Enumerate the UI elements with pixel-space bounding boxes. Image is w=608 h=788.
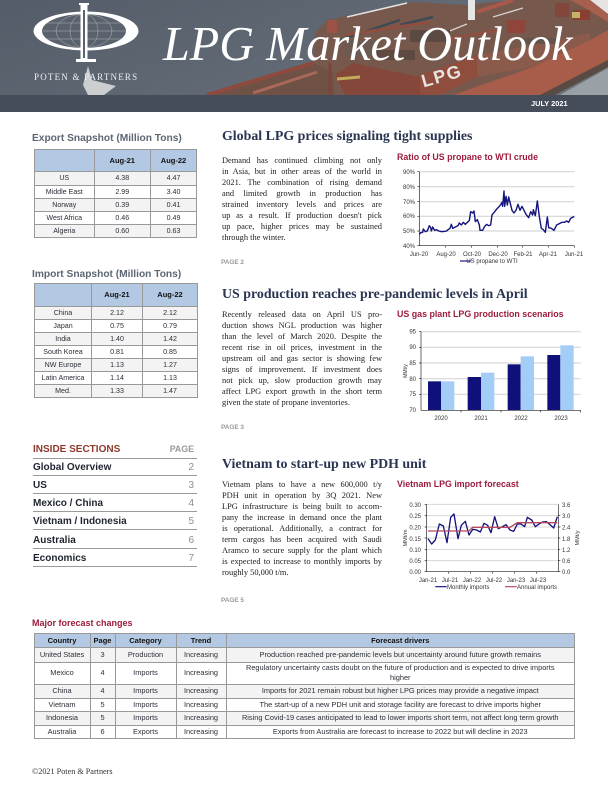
page reference: PAGE 5 bbox=[221, 597, 244, 604]
section row bbox=[33, 531, 197, 549]
line chart: propane to WTI ratio: Jun-20 bbox=[410, 252, 429, 258]
text: US production: given the state of propane inventories. bbox=[222, 398, 350, 407]
line chart: Vietnam import forecast: 1.8 bbox=[562, 537, 571, 543]
table: major forecast changes: higher bbox=[390, 673, 411, 682]
logo wordmark: POTEN & PARTNERS bbox=[34, 72, 138, 82]
text: global prices: Demand has continued climbing not only bbox=[222, 156, 382, 165]
table: import snapshot: 0.81 bbox=[110, 348, 124, 356]
table: major forecast changes: Imports bbox=[133, 713, 158, 722]
text: Vietnam: is operational. Additionally, a contract for bbox=[222, 524, 382, 533]
section row bbox=[33, 458, 197, 476]
bar chart: production scenarios: 70 bbox=[409, 408, 417, 414]
date band bbox=[0, 95, 608, 112]
table: major forecast changes: Australia bbox=[48, 727, 76, 736]
bar chart: production scenarios: 80 bbox=[409, 377, 417, 383]
text: Vietnam: PDH unit in operation by 3Q 2021. New bbox=[222, 491, 382, 500]
line chart: Vietnam import forecast: 0.20 bbox=[409, 526, 422, 532]
text: global prices: in Asia, but in other areas of the world in bbox=[222, 167, 382, 176]
heading: major forecast changes: Major forecast changes bbox=[32, 618, 133, 628]
line chart: propane to WTI ratio: US propane to WTI bbox=[466, 259, 518, 265]
text: US production: duction shows NGL production was higher bbox=[222, 321, 382, 330]
line chart: Vietnam import forecast: 0.15 bbox=[409, 537, 422, 543]
line chart: Vietnam import forecast: 3.0 bbox=[562, 514, 571, 520]
table: import snapshot: 1.13 bbox=[163, 374, 177, 382]
line chart: propane to WTI ratio: Jun-21 bbox=[565, 252, 584, 258]
page reference: PAGE 2 bbox=[221, 259, 244, 266]
line chart: propane to WTI ratio: 40% bbox=[403, 244, 416, 250]
table: export snapshot: 4.47 bbox=[167, 174, 180, 182]
table: import snapshot: 1.40 bbox=[110, 334, 124, 342]
line chart: Vietnam import forecast: Jan-21 bbox=[419, 578, 438, 584]
table: import snapshot: Med. bbox=[55, 386, 71, 394]
section row: Vietnam / Indonesia bbox=[33, 516, 127, 527]
line chart: propane to WTI ratio: 50% bbox=[403, 229, 416, 235]
section row: US bbox=[33, 480, 47, 491]
table: import snapshot: China bbox=[54, 308, 72, 316]
table: major forecast changes: Rising Covid-19 cases anticipated to lead to lower imports short term, not affect long term growth bbox=[242, 713, 559, 722]
inside sections heading bbox=[33, 442, 197, 459]
line chart: propane to WTI ratio: 80% bbox=[403, 185, 416, 191]
table: export snapshot: 0.39 bbox=[115, 201, 129, 209]
text: US production: than the level of March 2020. Despite the bbox=[222, 332, 382, 341]
table: export snapshot: 0.49 bbox=[167, 214, 180, 222]
section row: 5 bbox=[188, 516, 194, 527]
table: major forecast changes: Exports from Australia are forecast to increase to 2022 but will decline in 2023 bbox=[273, 727, 528, 736]
line chart: Vietnam import forecast: 0.6 bbox=[562, 559, 571, 565]
table: export snapshot: 4.38 bbox=[115, 174, 129, 182]
bar chart: production scenarios: 85 bbox=[409, 361, 417, 367]
bar chart: production scenarios: 95 bbox=[409, 330, 417, 336]
line chart: Vietnam import forecast: Annual imports bbox=[517, 585, 557, 591]
table: export snapshot: Algeria bbox=[53, 227, 75, 235]
table: import snapshot: 1.27 bbox=[163, 360, 177, 368]
chart title: Vietnam imports: Vietnam LPG import forecast bbox=[397, 479, 519, 489]
table: import snapshot: Aug-21 bbox=[104, 290, 130, 299]
bar chart: production scenarios: 2022 bbox=[514, 416, 528, 422]
line chart: Vietnam import forecast: Jul-23 bbox=[530, 578, 547, 584]
bar chart: production scenarios: 2020 bbox=[434, 416, 448, 422]
section row bbox=[33, 549, 197, 567]
table: import snapshot: 0.79 bbox=[163, 322, 177, 330]
ship hull lettering: LPG bbox=[419, 61, 464, 91]
chart title: propane ratio: Ratio of US propane to WTI crude bbox=[397, 152, 538, 162]
section row: Australia bbox=[33, 535, 76, 546]
bar chart: production scenarios: 90 bbox=[409, 345, 417, 351]
line chart: Vietnam import forecast: Monthly imports bbox=[447, 585, 489, 591]
text: US production: signs of improvement. If investment does bbox=[222, 365, 382, 374]
table: major forecast changes bbox=[34, 633, 575, 739]
line chart: Vietnam import forecast: 0.25 bbox=[409, 514, 422, 520]
text: Vietnam bbox=[222, 480, 382, 577]
line chart: Vietnam import forecast: MMt/m bbox=[403, 529, 409, 546]
table: major forecast changes: Indonesia bbox=[46, 713, 78, 722]
section row bbox=[33, 476, 197, 494]
text: Vietnam: Vietnam plans to have a new 600,000 t/y bbox=[222, 480, 382, 489]
table: major forecast changes: Increasing bbox=[184, 700, 218, 709]
line chart: propane to WTI ratio: 90% bbox=[403, 170, 416, 176]
table: major forecast changes: Increasing bbox=[184, 686, 218, 695]
table: import snapshot: 1.13 bbox=[110, 360, 124, 368]
section row: 4 bbox=[188, 498, 194, 509]
text: US production: recent rise in oil prices, investment in the bbox=[222, 343, 382, 352]
panel: inside sections bbox=[33, 444, 197, 567]
table: major forecast changes: Production bbox=[128, 650, 163, 659]
bar chart: production scenarios: MMt/y bbox=[403, 364, 409, 378]
line chart: propane to WTI ratio: Dec-20 bbox=[488, 252, 508, 258]
text: US production: affect LPG export growth in the short term bbox=[222, 387, 382, 396]
table: major forecast changes: Forecast drivers bbox=[371, 636, 429, 644]
table: major forecast changes: 4 bbox=[100, 686, 105, 695]
line chart: Vietnam import forecast: 2.4 bbox=[562, 526, 571, 532]
line chart: propane to WTI ratio: Feb-21 bbox=[513, 252, 533, 258]
section row: Global Overview bbox=[33, 462, 111, 473]
table: major forecast changes: Category bbox=[129, 636, 162, 644]
table: import snapshot: India bbox=[55, 334, 71, 342]
line chart: Vietnam import forecast: MMt/y bbox=[575, 530, 581, 545]
bar chart: production scenarios: 2023 bbox=[554, 416, 568, 422]
table: export snapshot: Aug-22 bbox=[161, 156, 186, 164]
footer copyright: ©2021 Poten & Partners bbox=[32, 767, 113, 776]
text: Vietnam: Aramco to secure supply for the plant which bbox=[222, 546, 382, 555]
text: US production: upstream oil and gas sector is showing few bbox=[222, 354, 382, 363]
section row: 2 bbox=[188, 462, 194, 473]
text: Vietnam: term cargos has been acquired with Saudi bbox=[222, 535, 382, 544]
text: global prices: and limited growth in production has bbox=[222, 189, 382, 198]
table: import snapshot: 0.85 bbox=[163, 348, 177, 356]
text: global prices bbox=[222, 156, 382, 242]
logo emblem bbox=[34, 3, 138, 95]
table: export snapshot: 0.60 bbox=[115, 227, 129, 235]
text: Vietnam: roughly 50,000 t/m. bbox=[222, 568, 289, 577]
heading: import snapshot: Import Snapshot (Million Tons) bbox=[32, 269, 181, 280]
text: Vietnam: pany the increase in demand once the plant bbox=[222, 513, 382, 522]
section row bbox=[33, 494, 197, 512]
table: major forecast changes: Page bbox=[94, 636, 111, 644]
table: export snapshot: Aug-21 bbox=[110, 156, 135, 164]
line chart: Vietnam import forecast: 0.05 bbox=[409, 559, 422, 565]
section row: Mexico / China bbox=[33, 498, 103, 509]
section row bbox=[33, 512, 197, 530]
table: import snapshot: 1.14 bbox=[110, 374, 124, 382]
section row: 6 bbox=[188, 535, 194, 546]
bar chart: production scenarios: 75 bbox=[409, 392, 417, 398]
text: global prices: through the winter. bbox=[222, 233, 286, 242]
header banner with ship photo, logo and title bbox=[0, 0, 608, 112]
table: import snapshot: Latin America bbox=[42, 374, 84, 382]
table: major forecast changes: Imports bbox=[133, 686, 158, 695]
line chart: propane to WTI ratio: 70% bbox=[403, 200, 416, 206]
line chart: Vietnam import forecast: 0.0 bbox=[562, 570, 571, 576]
table: major forecast changes: Imports for 2021 remain robust but higher LPG prices may provide a negative impact bbox=[262, 686, 539, 695]
table: import snapshot: 2.12 bbox=[163, 308, 177, 316]
logo: Poten and Partners bbox=[34, 3, 138, 95]
section row: 3 bbox=[188, 480, 194, 491]
table: major forecast changes: The start-up of a new PDH unit and storage facility are forecast to drive imports higher bbox=[260, 700, 541, 709]
text: Vietnam: LPG infrastructure is being built to accom- bbox=[222, 502, 382, 511]
section row: Economics bbox=[33, 553, 86, 564]
section row: 7 bbox=[188, 553, 194, 564]
title: LPG Market Outlook bbox=[163, 18, 573, 71]
line chart: propane to WTI ratio: 60% bbox=[403, 214, 416, 220]
line chart: Vietnam import forecast: Jan-22 bbox=[463, 578, 482, 584]
table: major forecast changes: Imports bbox=[133, 668, 158, 677]
table: major forecast changes: Country bbox=[48, 636, 76, 644]
text: global prices: up as a result. If production doesn't pick bbox=[222, 211, 382, 220]
table: major forecast changes: Regulatory uncertainty casts doubt on the future of production and is expected to drive imports bbox=[246, 663, 555, 672]
table: major forecast changes: Increasing bbox=[184, 650, 218, 659]
table: major forecast changes: 5 bbox=[100, 700, 105, 709]
chart title: gas plant production: US gas plant LPG production scenarios bbox=[397, 309, 564, 319]
table: major forecast changes: Production reached pre-pandemic levels but uncertainty around future growth remains bbox=[260, 650, 541, 659]
text: Vietnam: is expected to increase to monthly imports by bbox=[222, 557, 382, 566]
page reference: PAGE 3 bbox=[221, 424, 244, 431]
table: export snapshot: 0.41 bbox=[167, 201, 180, 209]
table: export snapshot: West Africa bbox=[46, 214, 82, 222]
table: export snapshot bbox=[34, 149, 197, 238]
table: major forecast changes: 5 bbox=[100, 713, 105, 722]
table: import snapshot: 1.33 bbox=[110, 386, 124, 394]
line chart: Vietnam import forecast: 0.30 bbox=[409, 503, 422, 509]
inside sections heading: INSIDE SECTIONS bbox=[33, 444, 120, 455]
table: export snapshot: 3.40 bbox=[167, 188, 180, 196]
table: export snapshot: 0.63 bbox=[167, 227, 180, 235]
table: export snapshot: US bbox=[59, 174, 69, 182]
text: global prices: strained inventory levels and prices are bbox=[222, 200, 382, 209]
heading: export snapshot: Export Snapshot (Million Tons) bbox=[32, 133, 182, 144]
line chart: Vietnam import forecast: Jul-21 bbox=[442, 578, 459, 584]
line chart: Vietnam import forecast: 1.2 bbox=[562, 548, 571, 554]
bar chart: production scenarios: 2021 bbox=[474, 416, 488, 422]
table: export snapshot: Norway bbox=[52, 201, 76, 209]
table: major forecast changes: United States bbox=[40, 650, 84, 659]
date: JULY 2021 bbox=[531, 99, 568, 108]
line chart: propane to WTI ratio: Aug-20 bbox=[436, 252, 456, 258]
table: import snapshot: Japan bbox=[53, 322, 73, 330]
table: import snapshot: 1.47 bbox=[163, 386, 177, 394]
table: import snapshot bbox=[34, 283, 198, 398]
table: major forecast changes: Increasing bbox=[184, 727, 218, 736]
table: import snapshot: South Korea bbox=[43, 348, 83, 356]
table: import snapshot: 2.12 bbox=[110, 308, 124, 316]
text: global prices: 2021. The combination of rising demand bbox=[222, 178, 382, 187]
line chart: propane to WTI ratio: Apr-21 bbox=[539, 252, 558, 258]
table: major forecast changes: Exports bbox=[133, 727, 158, 736]
heading: global prices: Global LPG prices signaling tight supplies bbox=[222, 129, 472, 144]
table: import snapshot: NW Europe bbox=[45, 360, 81, 368]
table: export snapshot: 0.46 bbox=[115, 214, 129, 222]
text: global prices: up pace, higher prices may be sustained bbox=[222, 222, 382, 231]
table: major forecast changes: China bbox=[52, 686, 72, 695]
text: US production: Recently released data on April US pro- bbox=[222, 310, 382, 319]
table: major forecast changes: Mexico bbox=[50, 668, 74, 677]
table: export snapshot: 2.99 bbox=[115, 188, 129, 196]
line chart: Vietnam import forecast: 3.6 bbox=[562, 503, 571, 509]
line chart: Vietnam import forecast: 0.00 bbox=[409, 570, 422, 576]
table: import snapshot: Aug-22 bbox=[157, 290, 183, 299]
text: US production: not pick up, slow production growth may bbox=[222, 376, 382, 385]
table: major forecast changes: 6 bbox=[100, 727, 105, 736]
table: major forecast changes: Increasing bbox=[184, 713, 218, 722]
ship photo illustration bbox=[0, 0, 608, 95]
line chart: Vietnam import forecast: Jan-23 bbox=[507, 578, 526, 584]
inside sections heading: PAGE bbox=[170, 444, 194, 454]
table: major forecast changes: Increasing bbox=[184, 668, 218, 677]
heading: Vietnam: Vietnam to start-up new PDH unit bbox=[222, 457, 426, 472]
table: import snapshot: 0.75 bbox=[110, 322, 124, 330]
table: major forecast changes: 3 bbox=[100, 650, 105, 659]
heading: US production: US production reaches pre-pandemic levels in April bbox=[222, 287, 528, 302]
table: major forecast changes: 4 bbox=[100, 668, 105, 677]
text: US production bbox=[222, 310, 382, 407]
table: major forecast changes: Vietnam bbox=[48, 700, 75, 709]
table: import snapshot: 1.42 bbox=[163, 334, 177, 342]
line chart: Vietnam import forecast: Jul-22 bbox=[486, 578, 503, 584]
table: major forecast changes: Imports bbox=[133, 700, 158, 709]
line chart: propane to WTI ratio: Oct-20 bbox=[463, 252, 482, 258]
line chart: Vietnam import forecast: 0.10 bbox=[409, 548, 422, 554]
table: export snapshot: Middle East bbox=[46, 188, 83, 196]
table: major forecast changes: Trend bbox=[191, 636, 211, 644]
